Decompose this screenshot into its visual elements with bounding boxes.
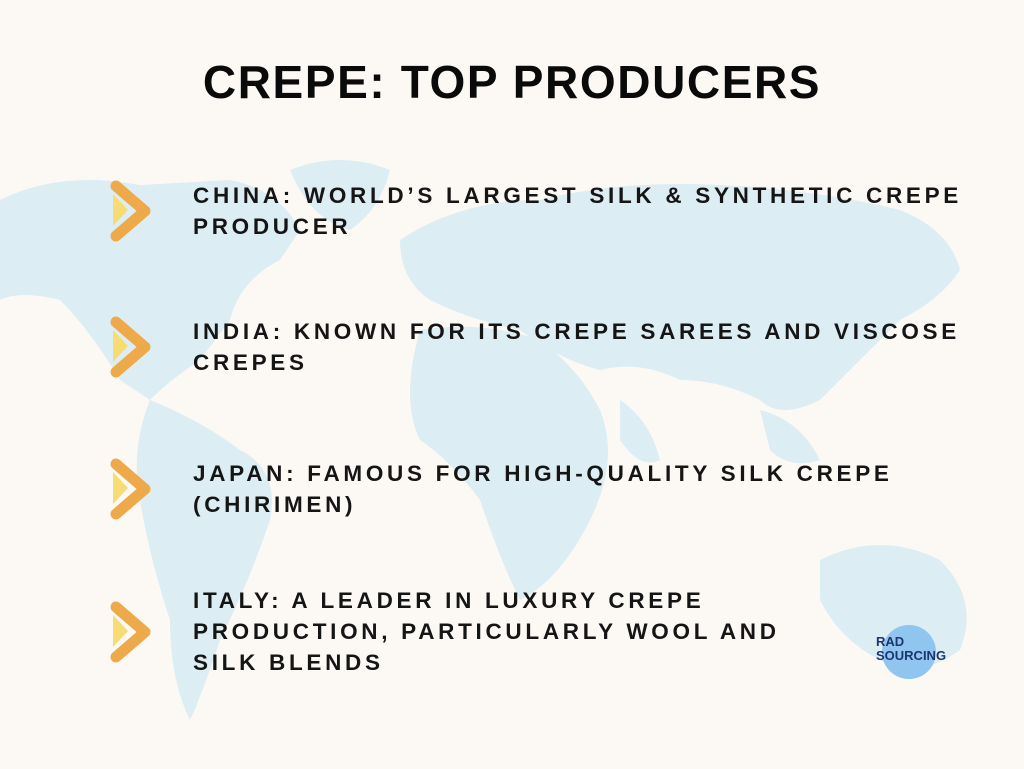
- logo: RAD Sourcing: SOURCING: [876, 648, 946, 663]
- title: CREPE: TOP PRODUCERS: [203, 56, 821, 108]
- item: India: INDIA: KNOWN FOR ITS CREPE SAREES AND VISCOSE: [193, 319, 960, 344]
- item: Japan: JAPAN: FAMOUS FOR HIGH-QUALITY SILK CREPE: [193, 461, 893, 486]
- logo: RAD Sourcing: RAD: [876, 634, 904, 649]
- item: Japan: (CHIRIMEN): [193, 492, 356, 517]
- icon: chevron: [110, 602, 150, 662]
- icon: chevron: [110, 180, 150, 242]
- icon: chevron: [110, 316, 150, 378]
- item: India: [110, 316, 960, 378]
- item: Japan: [110, 458, 893, 520]
- item: Italy: ITALY: A LEADER IN LUXURY CREPE: [193, 588, 704, 613]
- item: China: PRODUCER: [193, 214, 351, 239]
- item: China: [110, 180, 962, 242]
- item: China: CHINA: WORLD’S LARGEST SILK & SYNTHETIC CREPE: [193, 183, 962, 208]
- item: Italy: PRODUCTION, PARTICULARLY WOOL AND: [193, 619, 780, 644]
- item: India: CREPES: [193, 350, 308, 375]
- item: Italy: SILK BLENDS: [193, 650, 384, 675]
- icon: chevron: [110, 458, 150, 520]
- logo: RAD Sourcing: [876, 625, 946, 679]
- item: Italy: [110, 588, 780, 675]
